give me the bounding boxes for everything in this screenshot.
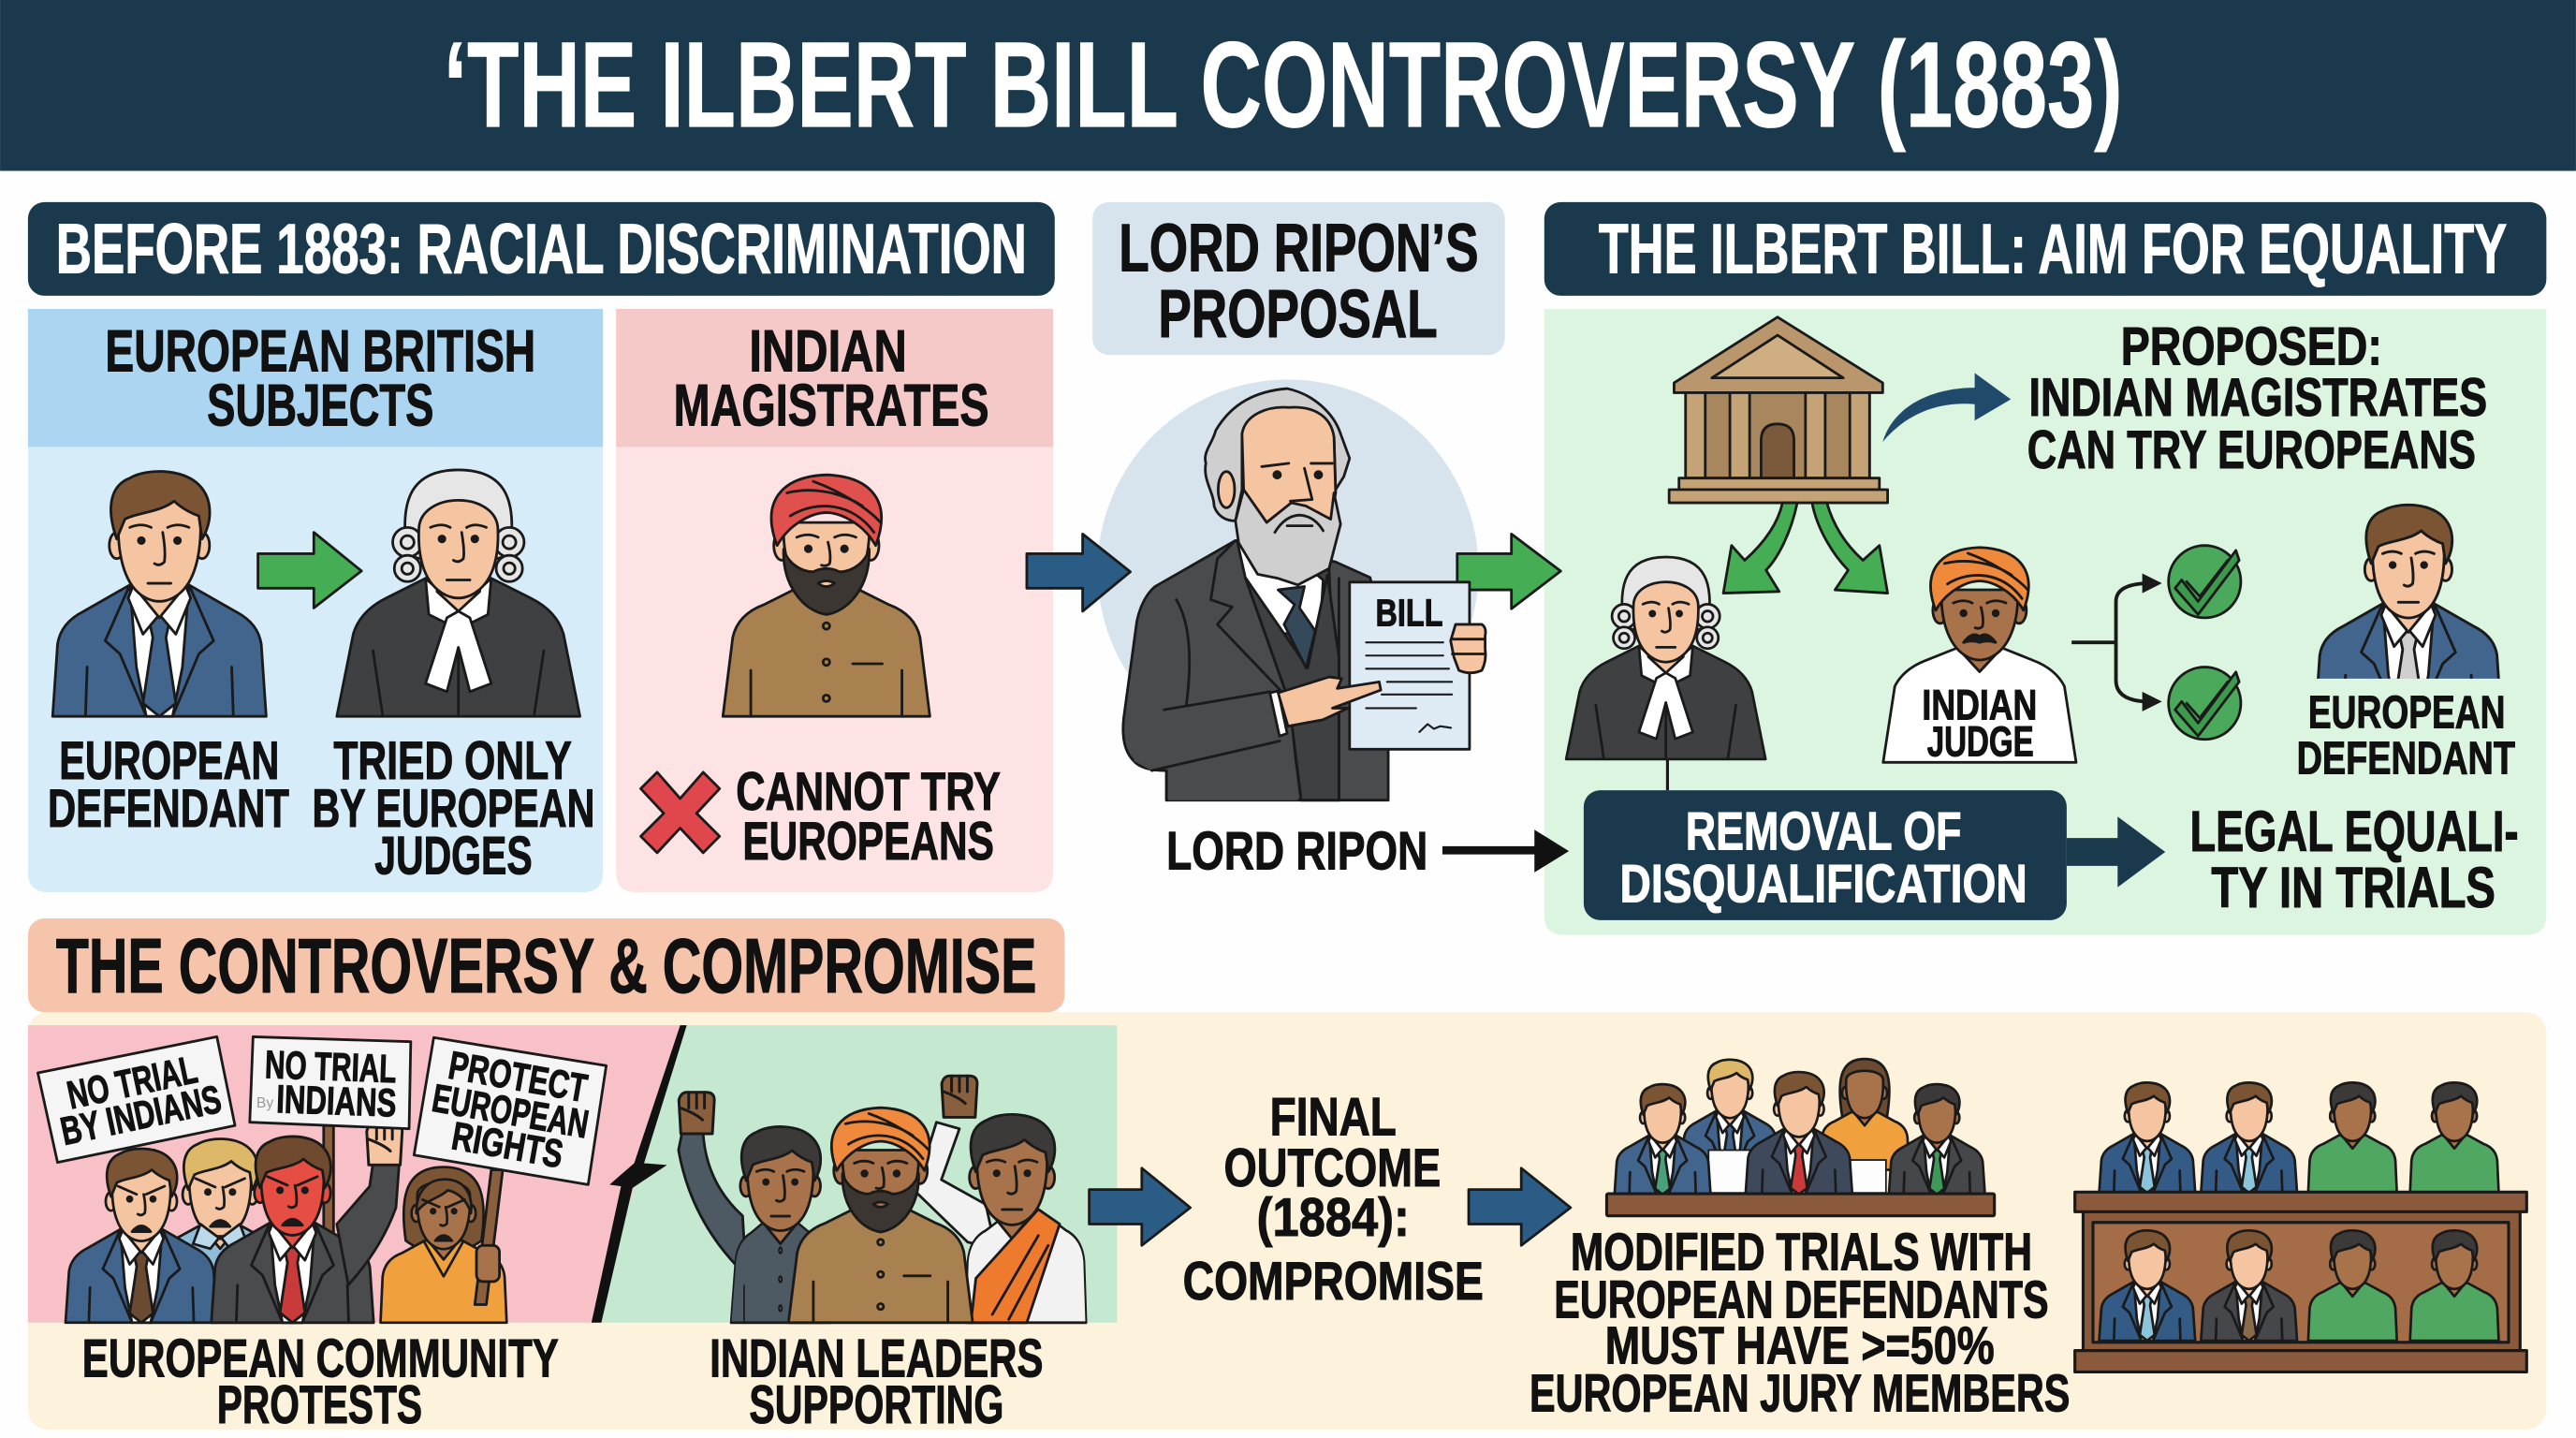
label: lord ripon: LORD RIPON — [1166, 821, 1427, 881]
title banner — [0, 0, 2576, 171]
label: european community protests — [82, 1329, 559, 1435]
panel: european british subjects — [28, 309, 603, 892]
sign: no trial by indians — [37, 1036, 235, 1163]
arrow: lord ripon to removal — [1442, 829, 1569, 873]
box: removal of disqualification: REMOVAL OF — [1686, 801, 1962, 861]
icon: check bottom — [2169, 668, 2241, 740]
heading: lord ripon's proposal: PROPOSAL — [1158, 277, 1438, 352]
label: cannot try europeans: EUROPEANS — [742, 812, 994, 872]
icon: court building — [1669, 317, 1888, 503]
icon: european defendant small — [2317, 504, 2500, 679]
sign: no trial by indians: BY INDIANS — [57, 1077, 225, 1153]
panel: controversy and compromise — [28, 918, 2546, 1435]
protester: red-faced man — [212, 1137, 373, 1323]
label: european community protests: PROTESTS — [217, 1375, 422, 1435]
text: modified trials: EUROPEAN DEFENDANTS — [1554, 1270, 2049, 1329]
sign: protect european rights — [414, 1037, 607, 1184]
fist — [367, 1123, 402, 1165]
icon: indian judge — [1883, 548, 2076, 762]
icon: european defendant — [52, 472, 266, 716]
backdrop circle — [1097, 379, 1479, 761]
text: modified trials: MODIFIED TRIALS WITH — [1571, 1223, 2032, 1282]
divider: lightning bolt — [592, 1025, 687, 1323]
arrow: discrimination to proposal — [1027, 534, 1131, 611]
arrow: building to indian judge — [1812, 503, 1888, 594]
text: modified trials — [1530, 1223, 2070, 1423]
label: tried only by european judges: TRIED ONLY — [333, 731, 572, 791]
label: indian leaders supporting: SUPPORTING — [749, 1375, 1003, 1435]
sign: no trial indians: By — [256, 1095, 273, 1111]
sign: protect european rights: EUROPEAN — [429, 1076, 592, 1147]
panel: ilbert bill — [1544, 309, 2546, 935]
lower row — [2100, 1230, 2498, 1341]
scene: european protests — [28, 1025, 683, 1323]
icon: red cross — [641, 772, 720, 853]
text: final outcome — [1183, 1088, 1484, 1312]
label: tried only by european judges — [313, 731, 594, 887]
protester: angry man left — [66, 1149, 217, 1323]
box: removal of disqualification — [1584, 790, 2067, 920]
label: european defendant — [48, 731, 289, 839]
arrow: curved to proposed — [1882, 373, 2011, 442]
panel heading: european british subjects: EUROPEAN BRITISH — [105, 319, 535, 385]
illustration: jury box — [2075, 1082, 2526, 1372]
label: tried only by european judges: JUDGES — [374, 827, 533, 887]
hand holding bill — [1451, 624, 1486, 673]
arrow: removal to equality — [2067, 816, 2165, 888]
sign: protect european rights: PROTECT — [446, 1043, 591, 1110]
panel heading: indian magistrates: INDIAN — [749, 319, 907, 385]
sign pole right — [475, 1170, 503, 1304]
sign pole left — [145, 1151, 154, 1183]
figure: lord ripon — [1123, 389, 1486, 800]
icon: european judge — [337, 470, 580, 716]
label: european defendant — [2297, 687, 2515, 785]
bench — [1606, 1194, 1995, 1216]
heading: before 1883 — [28, 202, 1055, 296]
leader: right with sash — [915, 1076, 1087, 1323]
scene: indian supporters — [593, 1025, 1117, 1323]
sign pole centre — [324, 1125, 333, 1232]
sign: no trial indians: NO TRIAL — [264, 1042, 397, 1091]
heading: controversy: THE CONTROVERSY & COMPROMISE — [56, 923, 1036, 1009]
icon: check top — [2169, 546, 2241, 618]
label: indian judge — [1922, 682, 2037, 765]
heading: controversy — [28, 918, 1064, 1012]
protester: blond man — [146, 1139, 294, 1323]
text: final outcome: FINAL — [1270, 1088, 1397, 1148]
label: indian leaders supporting — [710, 1329, 1044, 1435]
text: modified trials: MUST HAVE >=50% — [1605, 1316, 1995, 1375]
raised arm — [337, 1164, 400, 1284]
heading: before 1883: BEFORE 1883: RACIAL DISCRIMINATION — [56, 209, 1027, 287]
panel: indian magistrates — [616, 309, 1053, 892]
panel heading: indian magistrates — [674, 319, 989, 439]
label: cannot try europeans — [736, 762, 1001, 872]
text: legal equality — [2190, 800, 2519, 920]
arrow: building to judge — [1723, 503, 1797, 594]
label: indian leaders supporting: INDIAN LEADERS — [710, 1329, 1044, 1389]
label: indian judge: INDIAN — [1922, 682, 2037, 729]
text: proposed: PROPOSED: — [2121, 317, 2382, 377]
label: tried only by european judges: BY EUROPEAN — [313, 779, 594, 839]
text: final outcome: OUTCOME — [1224, 1138, 1441, 1198]
heading: lord ripon's proposal — [1092, 202, 1505, 355]
text: final outcome: (1884): — [1257, 1188, 1410, 1248]
label: european defendant: EUROPEAN — [59, 731, 279, 791]
icon: indian magistrate — [723, 475, 929, 716]
bottom rail — [2075, 1351, 2526, 1372]
bill document: BILL — [1376, 592, 1442, 635]
panel contents: ilbert bill — [1566, 317, 2519, 920]
label: european defendant: DEFENDANT — [48, 779, 289, 839]
arrow: defendant to judge — [258, 533, 361, 608]
label: cannot try europeans: CANNOT TRY — [736, 762, 1001, 822]
leader: middle with turban — [788, 1108, 973, 1323]
upper row — [2100, 1082, 2498, 1193]
sign: no trial indians: INDIANS — [276, 1077, 397, 1125]
top rail — [2075, 1192, 2526, 1211]
illustration: jury group — [1606, 1059, 1995, 1216]
box: removal of disqualification: DISQUALIFICATION — [1620, 855, 2027, 915]
text: final outcome: COMPROMISE — [1183, 1252, 1484, 1312]
label: indian judge: JUDGE — [1927, 717, 2034, 765]
hand on pole — [476, 1245, 500, 1282]
heading: lord ripon's proposal: LORD RIPON’S — [1119, 212, 1479, 286]
panel heading: european british subjects: SUBJECTS — [207, 374, 433, 439]
arrow: to final outcome — [1090, 1168, 1191, 1245]
arrow: proposal to bill — [1457, 534, 1560, 609]
text: proposed — [2027, 317, 2487, 480]
sign: protect european rights: RIGHTS — [448, 1113, 566, 1176]
arrowheads: branch — [2143, 574, 2162, 712]
label: european community protests: EUROPEAN COMMUNITY — [82, 1329, 559, 1389]
leader: left with raised arm — [679, 1093, 830, 1323]
connector: judge to removal — [1666, 759, 1668, 790]
connector: branch to checks — [2071, 583, 2145, 701]
bill document — [1350, 582, 1470, 749]
arrow: to modified trials — [1469, 1168, 1571, 1245]
text: legal equality: TY IN TRIALS — [2211, 856, 2496, 920]
panel heading: indian magistrates: MAGISTRATES — [674, 374, 989, 439]
panel heading: european british subjects — [105, 319, 535, 439]
icon: judge — [1566, 557, 1765, 759]
text: modified trials: EUROPEAN JURY MEMBERS — [1530, 1364, 2070, 1423]
sign: no trial by indians: NO TRIAL — [64, 1047, 201, 1117]
sign: no trial indians — [250, 1036, 411, 1129]
label: european defendant: DEFENDANT — [2297, 734, 2515, 785]
sleeve and pointing hand — [1134, 692, 1286, 770]
protester: woman — [381, 1167, 506, 1323]
label: european defendant: EUROPEAN — [2308, 687, 2505, 738]
